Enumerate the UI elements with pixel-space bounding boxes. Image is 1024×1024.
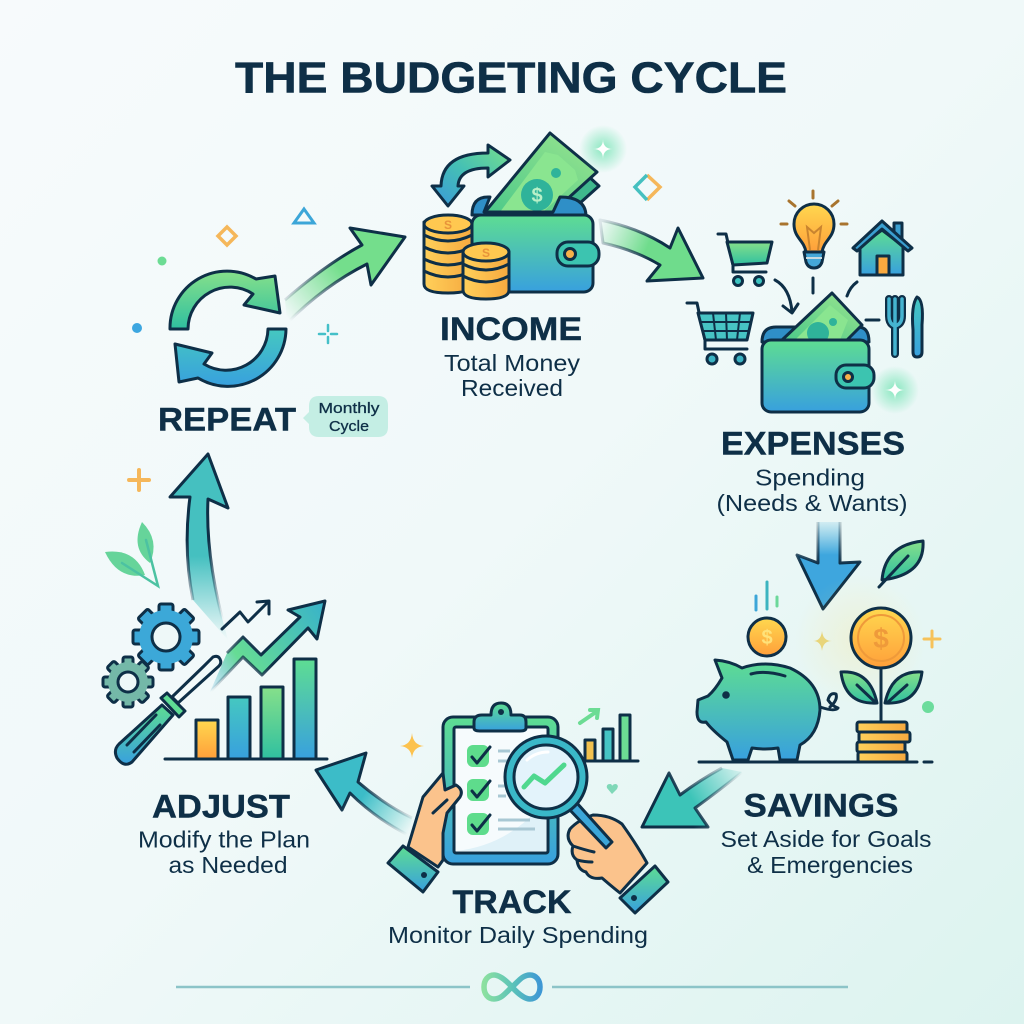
decoration: sparkle and heart <box>400 733 618 794</box>
callout: monthly cycle: Monthly <box>318 400 380 417</box>
chart: bar chart <box>165 659 327 759</box>
checklist <box>467 745 535 835</box>
description: Total Money <box>444 350 581 376</box>
arrow: repeat to income <box>285 228 405 323</box>
panel: income <box>424 125 660 401</box>
heading: ADJUST <box>152 788 290 824</box>
icon: curved exchange arrow <box>432 145 510 206</box>
footer: divider with infinity symbol <box>176 975 848 999</box>
description line 2: & Emergencies <box>747 852 913 878</box>
icon: infinity <box>484 975 540 999</box>
panel: track <box>388 703 668 948</box>
arrow: track to adjust <box>316 753 412 835</box>
icon: small gear <box>103 657 153 707</box>
description: Set Aside for Goals <box>720 826 932 852</box>
connectors into wallet <box>775 278 879 320</box>
arrow: adjust to repeat <box>170 454 228 640</box>
icon: wallet <box>472 197 599 292</box>
icon: screwdriver <box>115 656 221 764</box>
heading: INCOME <box>440 311 582 347</box>
panel: repeat <box>132 209 388 438</box>
icon: green cycle arrow <box>170 271 280 329</box>
icon: sparkle with glow <box>579 125 627 173</box>
description: Modify the Plan <box>138 826 310 852</box>
icon: coin stacks <box>424 215 509 299</box>
icon: lower shopping cart <box>687 303 753 364</box>
icon: falling coin <box>748 582 786 656</box>
decoration: diamond <box>635 175 660 200</box>
heading: SAVINGS <box>744 788 898 824</box>
callout: monthly cycle <box>303 396 388 437</box>
icon: leaf <box>879 541 923 587</box>
icon: bank notes: $ <box>531 185 543 207</box>
icon: leaves <box>105 522 158 586</box>
decoration: shapes <box>132 209 337 343</box>
decoration: plus <box>129 470 149 490</box>
heading: REPEAT <box>158 402 296 438</box>
heading: EXPENSES <box>721 426 905 462</box>
icon: left hand and cuff <box>388 773 461 892</box>
icon: upper shopping cart <box>718 234 772 286</box>
icon: house <box>853 221 912 275</box>
icon: clipboard <box>443 703 558 864</box>
icon: small trend arrow <box>222 601 269 629</box>
ground line <box>699 760 932 764</box>
heading: TRACK <box>452 884 572 920</box>
description: Monitor Daily Spending <box>388 922 648 948</box>
description line 2: Received <box>461 375 563 401</box>
description line 2: as Needed <box>168 852 288 878</box>
icon: magnifying glass and right hand <box>505 736 668 913</box>
icon: fork and knife <box>889 297 922 357</box>
description line 2: (Needs & Wants) <box>716 490 908 516</box>
icon: sparkle with glow <box>871 366 919 414</box>
panel: adjust <box>103 454 327 878</box>
icon: coin plant: $ <box>873 623 889 654</box>
icon: bank notes <box>485 133 599 212</box>
arrow: income to expenses <box>600 220 703 281</box>
title: THE BUDGETING CYCLE <box>235 54 787 102</box>
icon: mini bar chart <box>580 710 638 761</box>
icon: coin stacks: S <box>444 218 452 232</box>
decoration: sparkle, plus and dot <box>813 631 940 713</box>
icon: gold coin stack <box>857 722 910 762</box>
icon: light bulb <box>781 191 847 268</box>
icon: piggy bank <box>697 660 838 760</box>
arrow: expenses to savings <box>797 522 860 609</box>
icon: coin stacks: S <box>482 246 490 260</box>
panel: savings <box>697 541 940 878</box>
callout: monthly cycle: Cycle <box>329 418 369 435</box>
icon: coin plant <box>841 608 922 762</box>
arrow: savings to track <box>642 768 742 827</box>
panel: expenses <box>687 191 922 516</box>
glow behind coins <box>795 575 925 705</box>
icon: large gear <box>133 604 199 670</box>
icon: wallet with note <box>762 293 874 412</box>
icon: blue cycle arrow <box>175 329 286 386</box>
chart: rising trend arrow <box>210 601 325 692</box>
description: Spending <box>755 464 865 490</box>
icon: wallet clasp <box>557 242 599 266</box>
icon: falling coin: $ <box>761 627 773 649</box>
